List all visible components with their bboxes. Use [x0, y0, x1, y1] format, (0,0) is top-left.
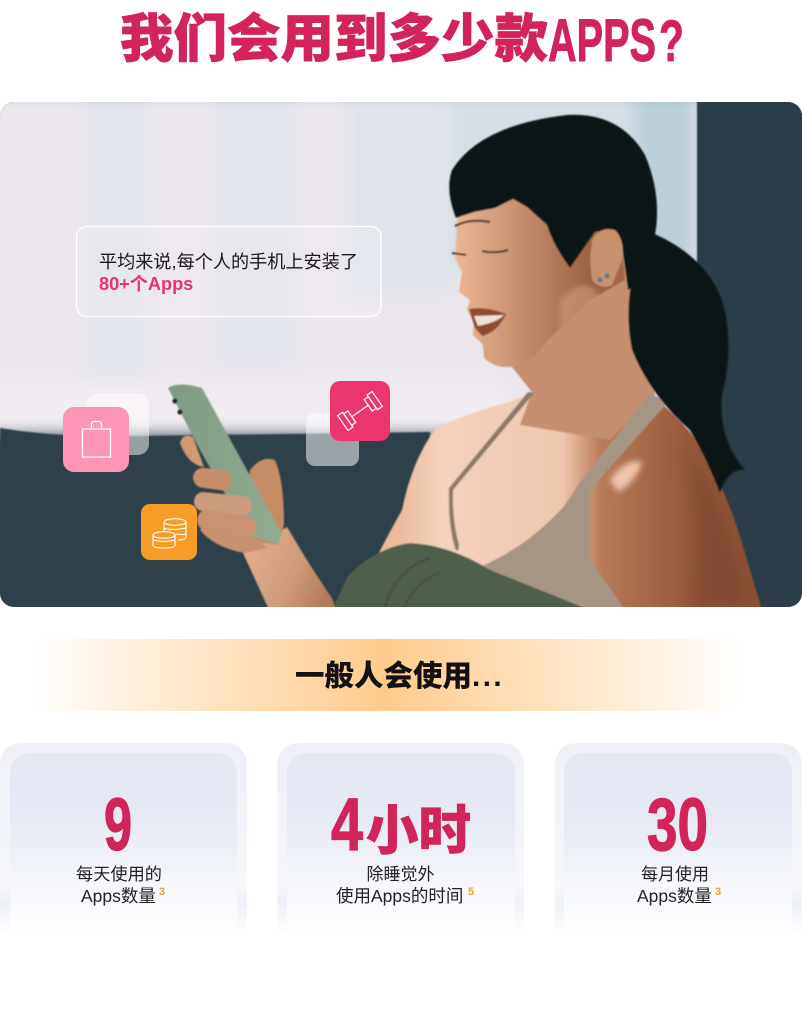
title: APPS [548, 7, 656, 74]
face [454, 198, 626, 368]
mouth [469, 308, 506, 336]
icon: coins [141, 504, 197, 560]
title: ? [659, 9, 684, 74]
panel: monthly apps: 3 [715, 886, 721, 898]
translucent square behind shopping icon [87, 393, 149, 455]
ponytail [628, 232, 745, 493]
forearm [243, 527, 336, 612]
body [378, 396, 762, 607]
icon: dumbbell [330, 381, 390, 441]
panel: hours: 5 [468, 886, 474, 898]
panel: hours [277, 743, 524, 936]
icon: shopping bag [63, 407, 129, 472]
title: 我们会用到多少款 [120, 11, 548, 69]
callout: 80+个Apps [99, 274, 193, 294]
banner heading: 一般人会使用... [295, 660, 504, 693]
stat: 4 hours: 小时 [366, 802, 471, 861]
thumb and palm [248, 458, 285, 545]
caption: 除睡觉外 [366, 865, 434, 884]
caption: 每天使用的 [76, 864, 162, 884]
translucent square behind fitness icon [306, 413, 359, 466]
callout: 平均来说,每个人的手机上安装了 [99, 252, 358, 272]
fingers [180, 435, 204, 467]
phone [168, 384, 282, 544]
title [120, 7, 684, 74]
panel: monthly apps [555, 743, 802, 936]
bra [480, 393, 668, 610]
hair [449, 115, 657, 290]
shoulder shading [608, 458, 740, 607]
hero photo [0, 90, 802, 620]
panel: daily apps: 3 [159, 886, 165, 898]
panel: daily apps: Apps数量 [81, 886, 156, 906]
panel: hours: 使用Apps的时间 [336, 886, 463, 906]
stat: 4 hours [331, 783, 471, 866]
stat: 30: 30 [647, 783, 708, 866]
callout [76, 226, 381, 316]
eye and brow [455, 221, 490, 226]
stat: 4 hours: 4 [331, 783, 363, 866]
woman [330, 115, 762, 610]
panel: monthly apps: Apps数量 [637, 886, 712, 906]
ear [590, 229, 623, 287]
stat: 9: 9 [104, 783, 132, 866]
yoga mat [332, 543, 590, 610]
panel: daily apps [0, 743, 247, 936]
neck [508, 265, 655, 440]
phone and hand [168, 384, 336, 612]
caption: 每月使用 [641, 864, 709, 884]
banner heading [30, 639, 740, 711]
